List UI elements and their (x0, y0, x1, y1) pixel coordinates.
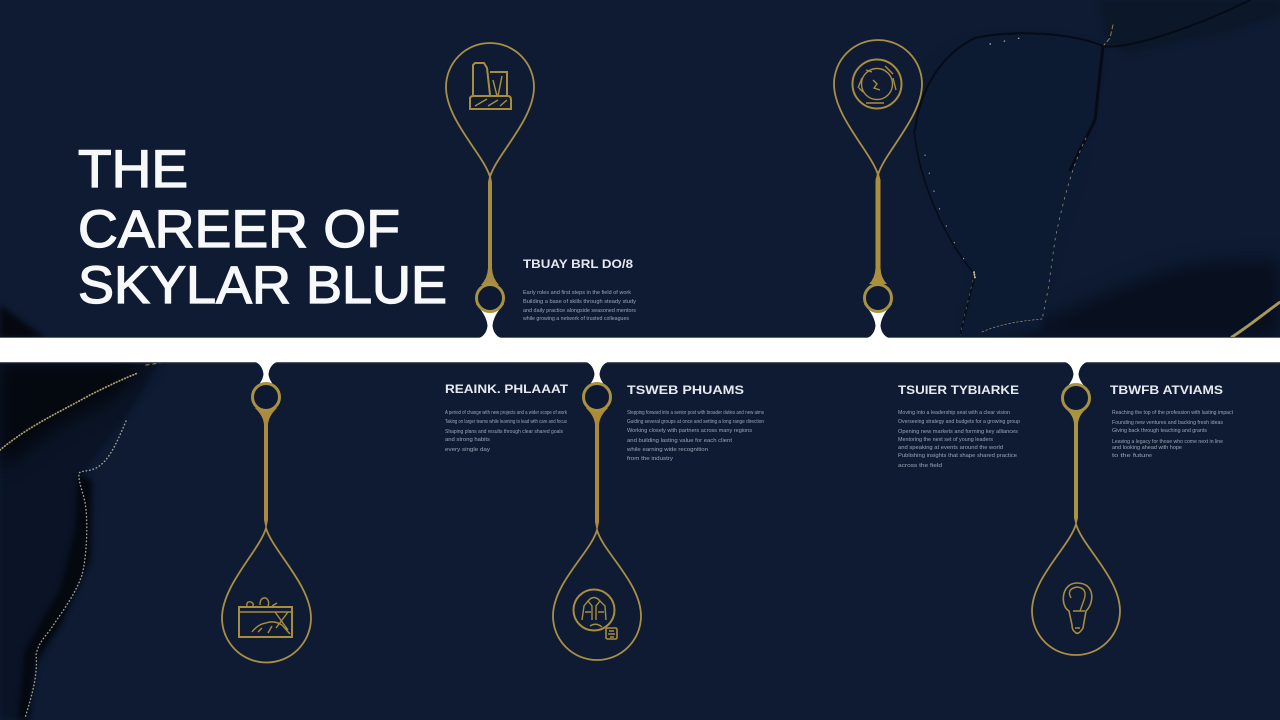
body text (445, 410, 567, 453)
body text (626, 410, 764, 462)
body text: Leaving a legacy for those who come next in line (1112, 439, 1223, 445)
heading: REAINK. PHLAAAT (445, 382, 569, 396)
text block: milestone 1 (522, 257, 636, 322)
body text: Founding new ventures and backing fresh ideas (1112, 420, 1223, 426)
icon: globe medallion (852, 60, 902, 108)
white horizontal timeline band (0, 337, 1280, 363)
title: CAREER OF (78, 200, 400, 259)
body text: and building lasting value for each client (627, 438, 732, 444)
teardrop outline (553, 530, 641, 660)
body text: Early roles and first steps in the field of work (523, 290, 631, 296)
icon: light bulb (1063, 583, 1092, 633)
body text (898, 410, 1020, 469)
body text: every single day (445, 447, 490, 453)
body text: across the field (898, 463, 942, 469)
stem (869, 170, 887, 284)
white neck joining band (249, 360, 283, 392)
stem (255, 408, 277, 530)
white neck joining band (580, 360, 614, 392)
title (78, 140, 447, 315)
body text: Shaping plans and results through clear shared goals (445, 429, 563, 435)
text block: milestone 4 left (445, 382, 569, 453)
body text: Overseeing strategy and budgets for a growing group (898, 419, 1020, 425)
body text: Reaching the top of the profession with lasting impact (1112, 410, 1233, 416)
milestone pin 1: upper, x 490 (446, 43, 534, 340)
heading: TSUIER TYBIARKE (898, 383, 1019, 397)
teardrop outline (222, 528, 311, 662)
white neck joining band (1059, 360, 1093, 392)
white neck joining band (473, 304, 507, 340)
heading: TBUAY BRL DO/8 (523, 257, 633, 271)
milestone pin 3: lower, x 266 (222, 360, 311, 662)
body text: Taking on larger teams while learning to lead with care and focus (445, 419, 567, 425)
icon: medallion with badge (574, 590, 617, 639)
body text (1112, 410, 1233, 459)
ring node (864, 284, 892, 312)
text block: milestone 5 right (1110, 383, 1233, 459)
stem (1066, 409, 1086, 526)
text block: milestone 4 right (626, 383, 764, 462)
icon: books and desk (470, 63, 511, 109)
ring node (584, 384, 610, 410)
body text: Guiding several groups at once and setting a long range direction (627, 419, 764, 425)
body text: and strong habits (445, 437, 490, 443)
text block: milestone 5 left (898, 383, 1020, 469)
teardrop outline (834, 40, 922, 175)
body text: Working closely with partners across many regions (627, 428, 752, 434)
milestone pin 4: lower, x 597 (553, 360, 641, 660)
body text: while growing a network of trusted colleagues (522, 316, 629, 322)
body text: Stepping forward into a senior post with broader duties and new aims (627, 410, 764, 416)
body text: from the industry (627, 456, 673, 462)
body text: A period of change with new projects and a wider scope of work (445, 410, 567, 416)
teardrop outline (1032, 524, 1120, 655)
heading: TBWFB ATVIAMS (1110, 383, 1223, 397)
body text: Building a base of skills through steady study (523, 299, 636, 305)
ring node (476, 284, 504, 312)
ring node (252, 384, 280, 410)
gold veins: upper right (925, 25, 1280, 337)
body text (522, 290, 636, 322)
title: THE (78, 140, 188, 199)
heading: TSWEB PHUAMS (627, 383, 744, 397)
body text: and daily practice alongside seasoned mentors (523, 308, 636, 314)
stem (586, 408, 608, 532)
gold veins: lower left (0, 363, 160, 718)
milestone pin 2: upper, x 878 (834, 40, 922, 340)
teardrop outline (446, 43, 534, 177)
body text: and speaking at events around the world (898, 445, 1003, 451)
title: SKYLAR BLUE (78, 256, 447, 315)
body text: and looking ahead with hope (1112, 445, 1182, 451)
body text: to the future (1112, 453, 1152, 459)
body text: Mentoring the next set of young leaders (898, 437, 993, 443)
body text: Opening new markets and forming key alliances (898, 429, 1018, 435)
body text: Moving into a leadership seat with a clear vision (898, 410, 1010, 416)
white neck joining band (861, 304, 895, 340)
icon: framed landscape (239, 598, 292, 637)
body text: Giving back through teaching and grants (1112, 428, 1207, 434)
body text: Publishing insights that shape shared practice (898, 453, 1017, 459)
body text: while earning wide recognition (626, 447, 708, 453)
milestone pin 5: lower, x 1076 (1032, 360, 1120, 655)
ring node (1062, 384, 1090, 412)
stem (481, 172, 499, 285)
